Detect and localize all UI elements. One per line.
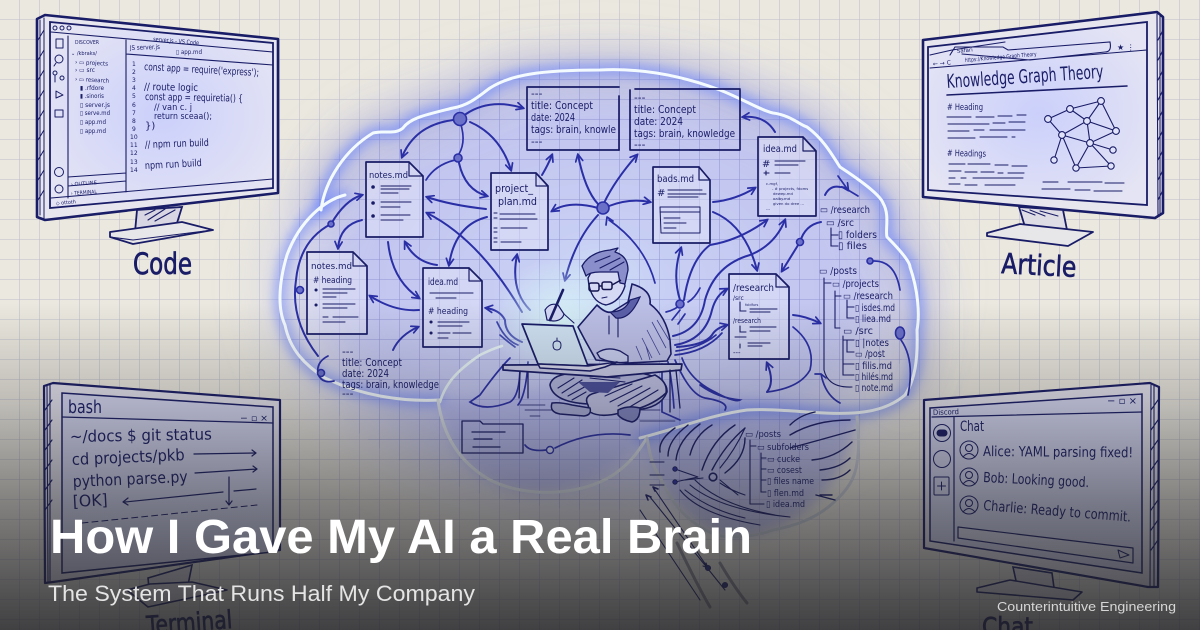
terminal text: − ▫ × <box>240 414 268 424</box>
document: right idea.md: --- <box>766 206 771 211</box>
terminal text: cd projects/pkb <box>71 445 185 469</box>
code window text: 12 <box>130 150 138 157</box>
code window text: › ▭ research <box>75 76 109 85</box>
laptop <box>522 324 617 371</box>
code window text: 14 <box>130 167 138 174</box>
hoodie <box>578 284 671 363</box>
code window text: 10 <box>130 134 138 141</box>
browser text: https://Knowledge Graph Theory <box>965 52 1037 64</box>
network nodes <box>296 112 904 454</box>
frontmatter card 1 <box>527 87 619 150</box>
browser text: Knowledge Graph Theory <box>946 61 1104 93</box>
terminal arrows <box>123 450 257 505</box>
folder tree: research: ▭ /src <box>826 218 854 229</box>
browser text: ← → C <box>933 59 951 68</box>
document: right idea.md <box>758 137 816 216</box>
chat messages: − ▫ × <box>1107 396 1137 407</box>
brainstem arrows <box>640 487 728 600</box>
frontmatter note, lower left: --- <box>342 346 354 358</box>
monitor stand <box>110 207 213 244</box>
head and hair <box>582 248 628 305</box>
code window text: ▯ app.md <box>80 119 106 126</box>
code window text: 13 <box>130 159 138 166</box>
frontmatter card 2: --- <box>634 92 646 104</box>
folder tree: posts: ▯ note.md <box>855 383 893 394</box>
code window text: ▯ server.js <box>80 102 110 109</box>
document: bads.md: # <box>657 188 665 199</box>
chat messages: Bob: Looking good. <box>983 470 1089 491</box>
laptop logo <box>553 338 561 350</box>
monitor stand <box>127 565 227 607</box>
document: right idea.md: oalby.md <box>773 196 791 201</box>
document: right idea.md: # <box>762 159 770 170</box>
activity bar icons <box>53 39 64 193</box>
document: research: /research <box>733 283 774 294</box>
folder tree: posts: ▯ isdes.md <box>855 303 895 314</box>
code window text: const app = require('express'); <box>144 62 259 79</box>
code window text: ▯ app.md <box>176 48 202 56</box>
code window text: 6 <box>132 102 136 109</box>
frontmatter card 1: tags: brain, knowle <box>531 124 616 136</box>
browser text: # Headings <box>947 149 986 160</box>
code window text: 1 <box>132 61 136 68</box>
code window text: › OUTLINE <box>71 180 97 188</box>
code window text <box>56 36 259 207</box>
frontmatter card 2: date: 2024 <box>634 116 683 128</box>
title: How I Gave My AI a Real Brain <box>50 511 752 564</box>
folder tree: posts: ▯ |notes <box>855 338 889 349</box>
browser text: ★ ⋮ <box>1117 43 1135 52</box>
frontmatter card 2 <box>630 89 740 151</box>
folder tree: lower posts: ▯ flen.md <box>767 489 804 499</box>
code window text: ▮ .sinoris <box>80 93 104 100</box>
chat sidebar icons <box>934 424 950 495</box>
label: Code: Code <box>133 247 192 281</box>
brain outline <box>280 70 918 607</box>
document: research: --- <box>733 349 741 357</box>
folder tree: posts: ▭ /research <box>843 291 893 302</box>
code window text: 5 <box>132 93 136 100</box>
code window text: // van c. j <box>154 103 192 113</box>
code window text: ▯ app.md <box>80 128 106 135</box>
folder tree: posts: ▯ hilés.md <box>855 372 893 383</box>
folder tree: research: ▯ files <box>838 241 867 252</box>
arrows: knowledge connections <box>295 104 910 454</box>
document: right idea.md: - # projects, fdoms <box>772 186 808 191</box>
monitor: article <box>923 12 1163 284</box>
label: Article: Article <box>1001 247 1077 284</box>
code window text: JS server.js <box>129 43 161 52</box>
code window text: › ▭ src <box>75 67 95 74</box>
folder tree: posts: ▭ /posts <box>819 266 857 277</box>
folder tree: posts: ▭ /src <box>843 326 873 337</box>
monitor: terminal <box>44 383 280 630</box>
frontmatter card 1: date: 2024 <box>531 112 575 124</box>
folder tree: posts: ▯ liea.md <box>855 314 891 325</box>
table <box>503 364 682 412</box>
code window text: 9 <box>132 126 136 133</box>
crossed legs <box>550 373 667 422</box>
folder tree: posts: ▭ /projects <box>832 279 879 290</box>
chat messages: Charlie: Ready to commit. <box>983 498 1131 526</box>
frontmatter note, lower left <box>342 346 439 400</box>
monitor stand <box>987 207 1093 246</box>
monitor: chat <box>924 383 1159 630</box>
monitor stand <box>977 567 1082 600</box>
code window text: return sceaa(); <box>154 112 212 122</box>
code window text: 3 <box>132 77 136 84</box>
article body lines <box>947 115 1124 191</box>
window dots <box>53 26 71 30</box>
document: notes.md <box>366 162 423 237</box>
lower brain tint <box>440 380 857 537</box>
send icon <box>1118 550 1129 558</box>
frontmatter card 1: --- <box>531 136 543 148</box>
folder tree: lower posts: ▯ files name <box>767 477 814 487</box>
hand with pen <box>545 290 574 323</box>
document: right idea.md: given do dree ... <box>773 201 804 206</box>
frontmatter card 1: title: Concept <box>531 100 593 112</box>
code window text: ◇ ottoth <box>56 199 76 207</box>
document: project plan <box>491 173 548 250</box>
folder tree: lower posts <box>745 430 814 510</box>
code window text: 8 <box>132 118 136 125</box>
document: left notes.md: # heading <box>313 276 352 286</box>
code window text: ▯ serve.md <box>80 110 110 117</box>
chat input box <box>958 527 1133 563</box>
document: notes.md: notes.md <box>369 171 408 181</box>
code window text: server.js - VS Code <box>153 36 200 47</box>
document: project plan: project_ <box>495 182 533 195</box>
code window text: 4 <box>132 85 136 92</box>
code window text: › ▭ projects <box>75 59 108 68</box>
floor shadow <box>520 405 675 421</box>
code window text: npm run build <box>145 158 202 172</box>
folder tree: research <box>820 205 877 252</box>
chat messages: Discord <box>933 407 959 417</box>
frontmatter note, lower left: tags: brain, knowledge <box>342 379 439 391</box>
code window text: const app = requiretia() { <box>145 92 243 105</box>
frontmatter note, lower left: date: 2024 <box>342 368 389 380</box>
folder tree: lower posts: ▭ cucke <box>767 455 800 465</box>
folder tree: posts: ▭ /post <box>855 349 885 360</box>
code window text: }) <box>145 121 155 132</box>
folder tree: posts <box>819 266 895 394</box>
folder tree: lower posts: ▯ idea.md <box>766 500 805 510</box>
folder sketch, lower brain <box>462 421 523 453</box>
document: project plan: plan.md <box>498 195 537 208</box>
folder tree: lower posts: ▭ cosest <box>767 466 802 476</box>
folder tree: research: ▭ /research <box>820 205 870 216</box>
code window text: ⌄ /kbraks/ <box>71 51 97 57</box>
code window text: // route logic <box>144 82 198 94</box>
code window text: 2 <box>132 69 136 76</box>
chat avatars <box>960 441 978 514</box>
document: bads.md: bads.md <box>657 174 694 185</box>
browser text <box>933 43 1135 160</box>
frontmatter card 2: --- <box>634 139 646 151</box>
terminal text <box>68 397 268 511</box>
folder tree: lower posts: ▭ subfolders <box>757 443 809 453</box>
document: research <box>729 274 789 359</box>
knowledge graph <box>1045 98 1119 171</box>
frontmatter note, lower left: title: Concept <box>342 357 402 369</box>
brain grid tint <box>282 60 920 510</box>
document: research: /research <box>733 317 761 325</box>
cerebellum folia <box>650 412 855 525</box>
frontmatter card 2: title: Concept <box>634 104 696 116</box>
frontmatter card 2: tags: brain, knowledge <box>634 128 735 140</box>
folder tree: posts: ▯ filis.md <box>855 361 892 372</box>
chat messages <box>933 396 1137 526</box>
terminal text: ~/docs $ git status <box>70 425 212 446</box>
chat messages: Chat <box>960 419 984 435</box>
monitor: code <box>37 15 278 281</box>
brain glow <box>245 35 955 535</box>
browser text: # Heading <box>947 103 983 113</box>
terminal text: python parse.py <box>72 467 188 491</box>
terminal text: bash <box>68 397 102 418</box>
document: right idea.md: idea.md <box>763 144 797 155</box>
frontmatter card 1: --- <box>531 88 543 100</box>
folder tree: lower posts: ▭ /posts <box>745 430 781 440</box>
document: idea.md: # heading <box>428 307 468 317</box>
document: right idea.md: dewep.md <box>773 191 794 196</box>
document: bads.md <box>653 167 710 243</box>
laptop glow <box>490 258 630 382</box>
code window text: 11 <box>130 142 138 149</box>
document: idea.md: idea.md <box>428 277 458 288</box>
attribution: Counterintuitive Engineering <box>997 599 1176 614</box>
code window text: ▮ .rfdore <box>80 85 104 92</box>
frontmatter note, lower left: --- <box>342 388 354 400</box>
code window text: 7 <box>132 110 136 117</box>
code window text: › TERMINAL <box>71 189 97 197</box>
document: research: foldfurs <box>745 303 758 307</box>
illustration: person at laptop <box>490 248 682 422</box>
code window text: DISCOVER <box>75 40 99 46</box>
document: left notes.md <box>307 252 367 334</box>
chat messages: Alice: YAML parsing fixed! <box>983 444 1133 461</box>
code window text: // npm run build <box>145 138 209 151</box>
terminal text: [OK] <box>72 490 108 511</box>
browser text: Safari <box>957 47 974 55</box>
subtitle: The System That Runs Half My Company <box>48 581 475 606</box>
document: right idea.md: c-mgf, <box>766 181 778 186</box>
glasses <box>589 280 621 291</box>
folder tree: research: ▯ folders <box>838 230 877 241</box>
document: idea.md <box>423 268 482 347</box>
document: left notes.md: notes.md <box>311 262 352 272</box>
document: research: /src <box>733 295 744 302</box>
